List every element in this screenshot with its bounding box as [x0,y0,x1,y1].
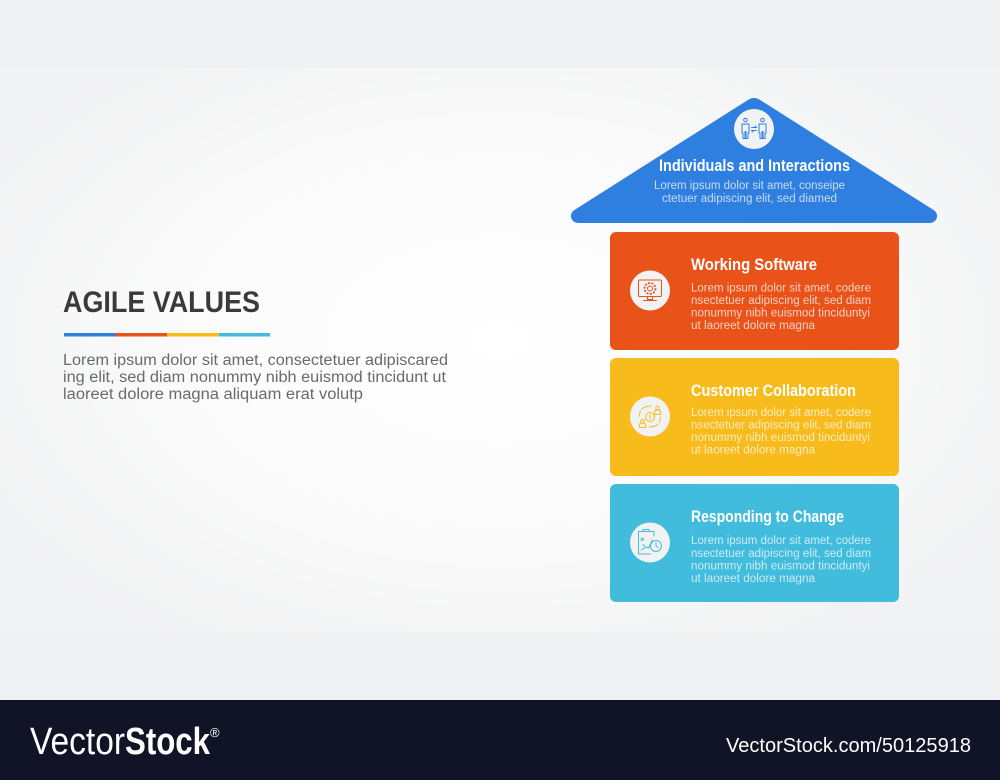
text: working software description: nsectetuer adipiscing elit, sed diam [691,295,871,307]
heading: responding to change: Responding to Change [691,507,844,526]
intro text block [63,352,448,403]
panel: customer collaboration [610,358,899,476]
title: AGILE VALUES [63,286,260,319]
footer logo: Vector [30,721,125,763]
text: responding to change description: Lorem ipsum dolor sit amet, codere [691,535,871,547]
text: responding to change description: ut laoreet dolore magna [691,573,816,585]
footer logo: Stock [125,721,211,763]
text: responding to change description [691,535,871,585]
text: customer collaboration description: nonummy nibh euismod tinciduntyi [691,432,870,444]
panel: individuals and interactions (roof) [571,98,937,223]
footer image id: VectorStock.com/50125918 [726,735,971,757]
heading: individuals and interactions: Individuals and Interactions [659,156,850,175]
icon: two people exchanging [734,109,774,149]
text: working software description [691,282,871,332]
intro text block: ing elit, sed diam nonummy nibh euismod tincidunt ut [63,369,447,386]
intro text block: laoreet dolore magna aliquam erat volutp [63,386,363,403]
footer logo [30,721,220,763]
panel: responding to change [610,484,899,602]
text: individuals description: ctetuer adipiscing elit, sed diamed [662,193,837,205]
text: customer collaboration description: ut laoreet dolore magna [691,444,816,456]
footer band [0,700,1000,780]
footer logo: ® [210,725,220,740]
text: responding to change description: nonummy nibh euismod tinciduntyi [691,560,870,572]
text: individuals description: Lorem ipsum dolor sit amet, conseipe [654,180,845,192]
icon: customers around a coin [630,396,670,436]
text: individuals description [654,180,845,205]
title underline: four colour bar [64,333,270,336]
heading: customer collaboration: Customer Collaboration [691,381,856,400]
icon: clipboard plan with clock [630,522,670,562]
icon: monitor with gear [630,270,670,310]
text: working software description: ut laoreet dolore magna [691,320,816,332]
intro text block: Lorem ipsum dolor sit amet, consectetuer adipiscared [63,352,448,369]
text: working software description: nonummy nibh euismod tinciduntyi [691,308,870,320]
panel: working software [610,232,899,350]
text: customer collaboration description: nsectetuer adipiscing elit, sed diam [691,420,871,432]
text: customer collaboration description [691,407,871,456]
heading: working software: Working Software [691,255,817,274]
text: working software description: Lorem ipsum dolor sit amet, codere [691,282,871,294]
text: customer collaboration description: Lorem ipsum dolor sit amet, codere [691,407,871,419]
text: responding to change description: nsectetuer adipiscing elit, sed diam [691,548,871,560]
